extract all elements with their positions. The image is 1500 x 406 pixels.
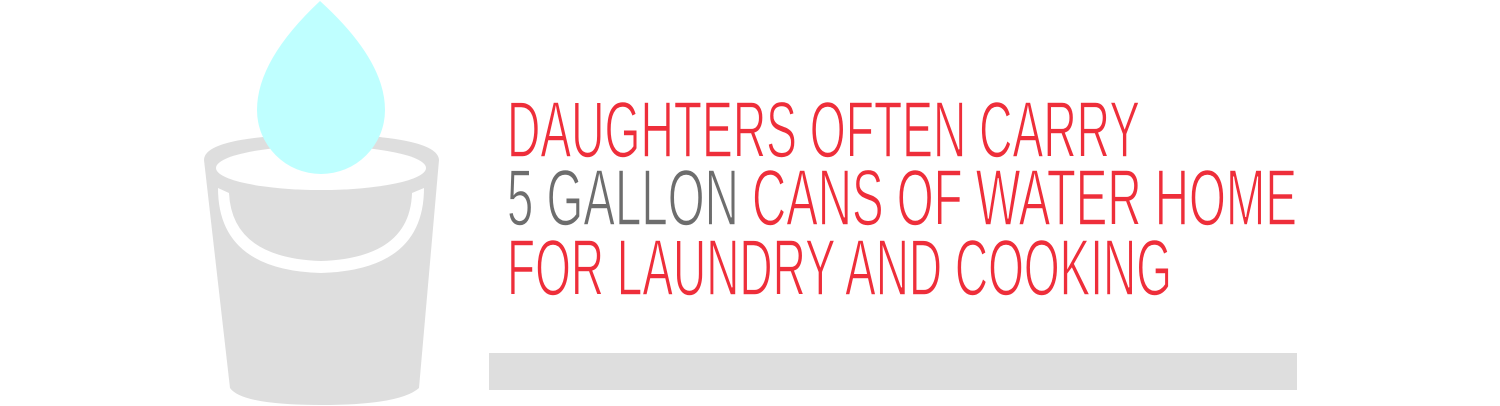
headline text (507, 85, 1297, 312)
icon: bucket (204, 134, 439, 405)
grey bar (489, 353, 1297, 390)
icon: water drop (257, 1, 385, 174)
